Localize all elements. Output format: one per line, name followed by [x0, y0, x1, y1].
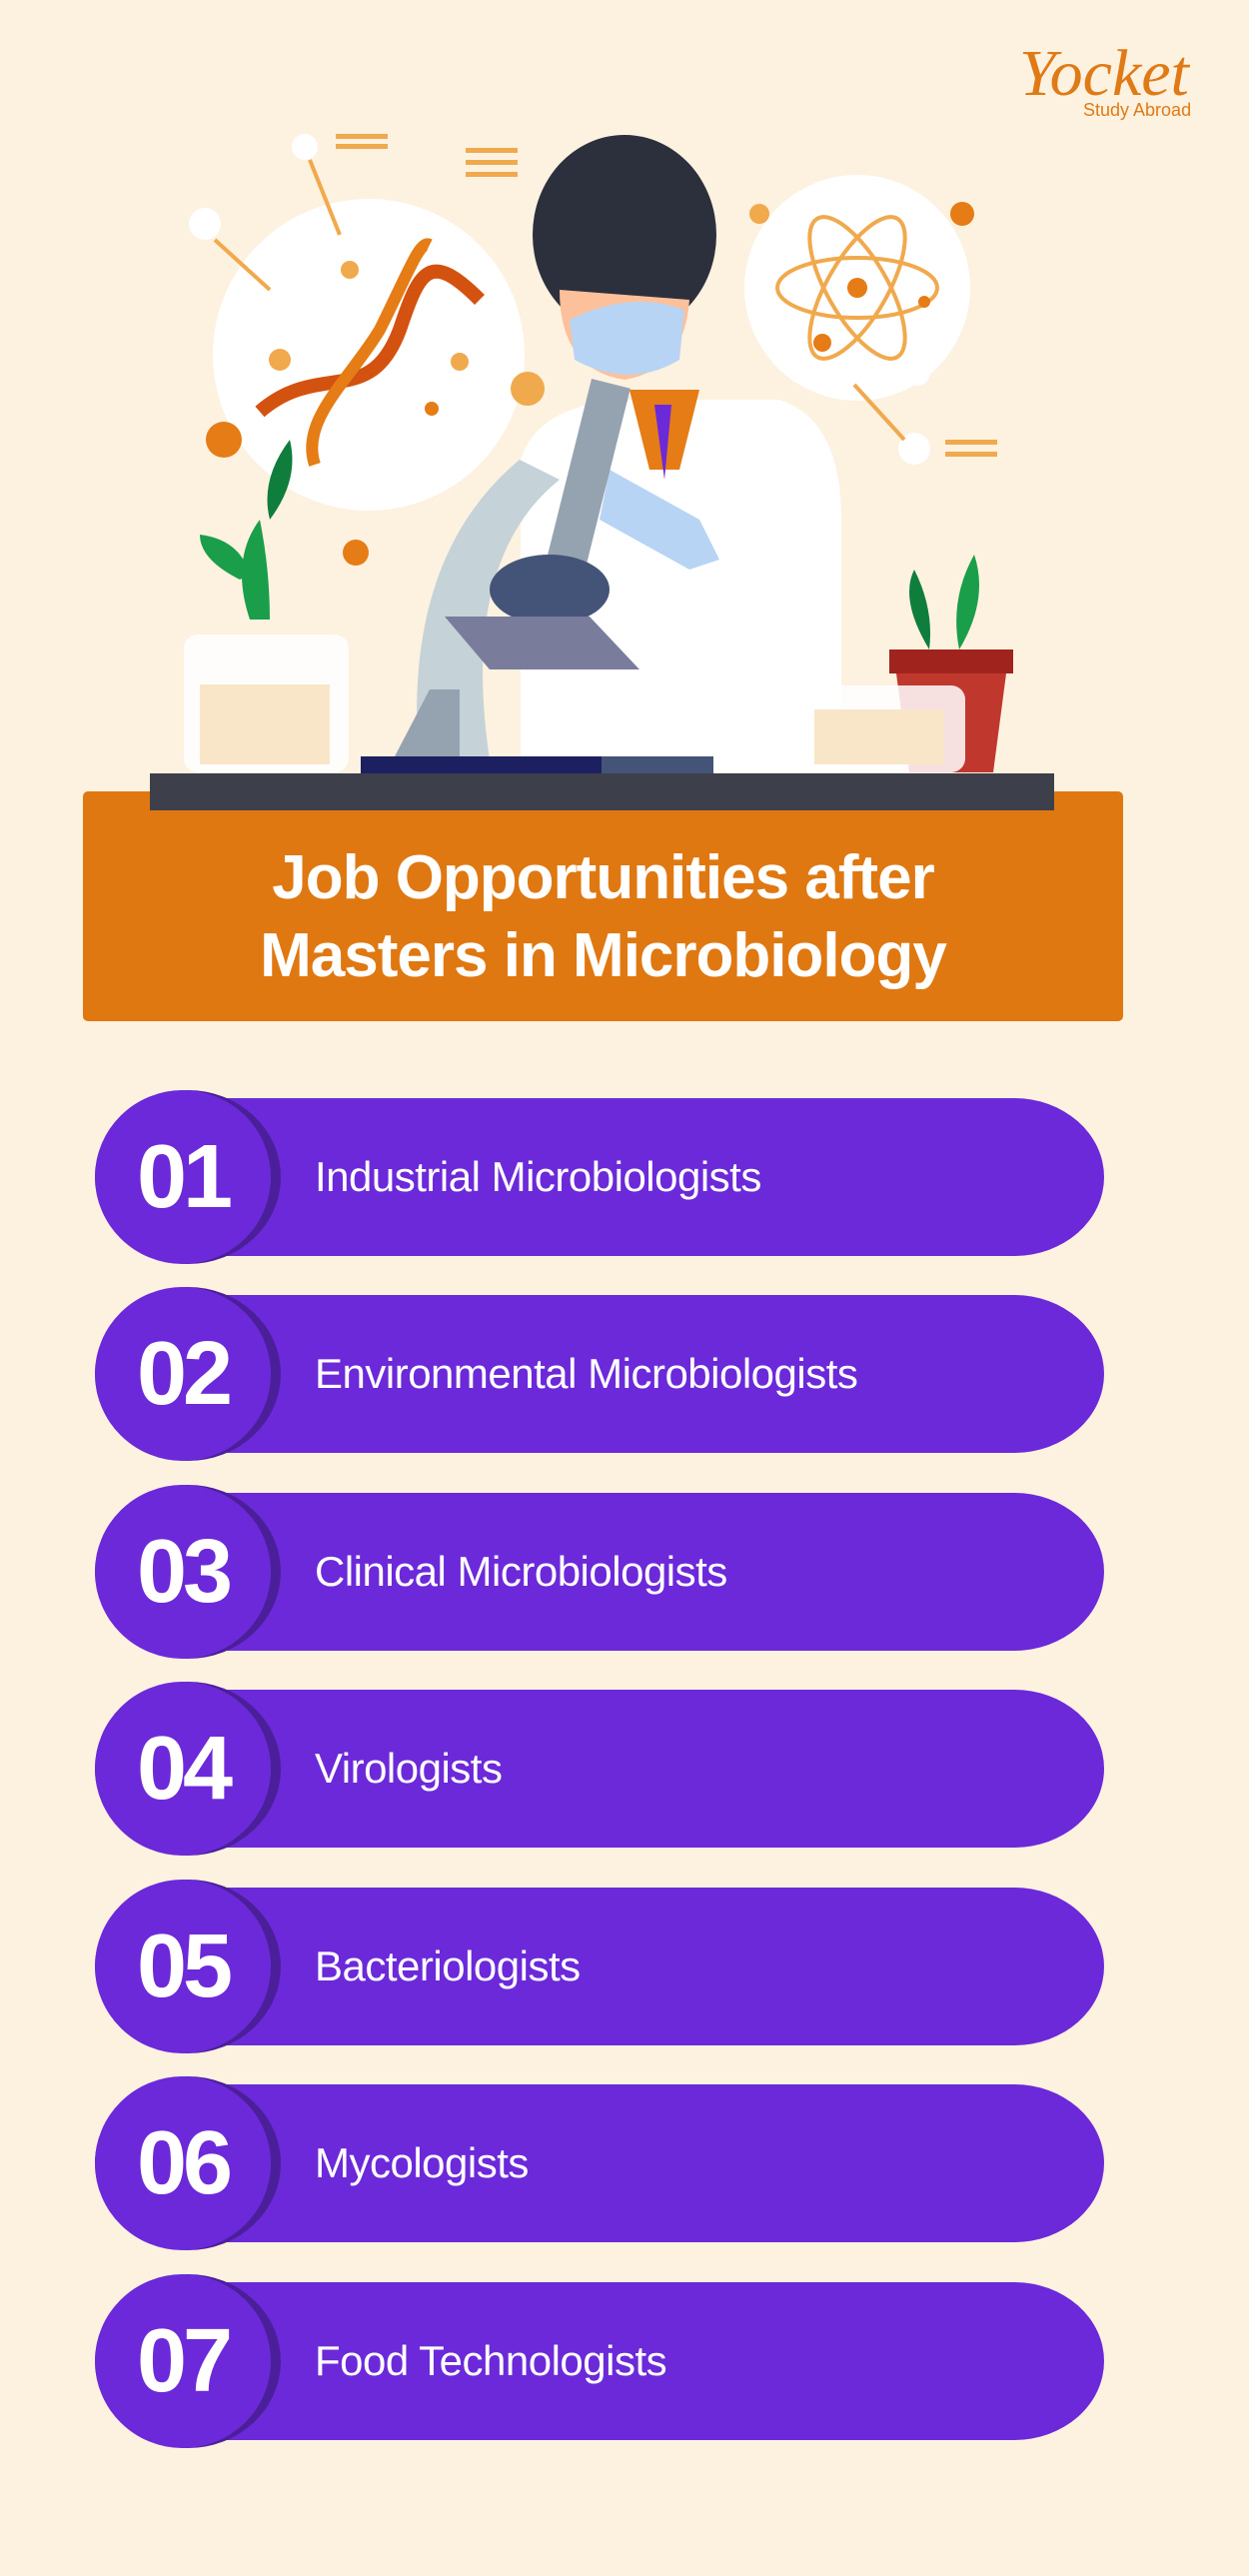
row 06: Mycologists — [315, 2139, 529, 2186]
desk — [150, 773, 1054, 811]
row 04: Virologists — [315, 1745, 502, 1792]
row 01 — [95, 1090, 1104, 1264]
row 05: 05 — [137, 1917, 229, 2016]
left beaker with plant — [184, 440, 349, 772]
atom circle — [744, 175, 997, 465]
row 04: 04 — [137, 1719, 229, 1819]
row 02: Environmental Microbiologists — [315, 1350, 857, 1397]
illustration: scientist with microscope — [150, 37, 1191, 810]
row 06 — [95, 2076, 1104, 2250]
row 06: 06 — [137, 2113, 229, 2213]
dna circle — [213, 199, 525, 511]
row 07: Food Technologists — [315, 2337, 666, 2384]
right plant pot — [889, 555, 1013, 772]
row 05 — [95, 1880, 1104, 2053]
row 07 — [95, 2274, 1104, 2448]
row 03 — [95, 1485, 1104, 1659]
row 04 — [95, 1682, 1104, 1856]
row 01: Industrial Microbiologists — [315, 1153, 761, 1200]
title banner: Masters in Microbiology — [260, 921, 946, 990]
row 05: Bacteriologists — [315, 1942, 581, 1989]
row 02: 02 — [137, 1324, 229, 1424]
row 03: 03 — [137, 1522, 229, 1622]
decorative dots — [189, 134, 545, 566]
row 01: 01 — [137, 1127, 229, 1227]
microscope — [361, 379, 713, 774]
row 07: 07 — [137, 2311, 229, 2411]
title banner: Job Opportunities after — [272, 843, 934, 912]
row 03: Clinical Microbiologists — [315, 1548, 727, 1595]
right dish — [801, 685, 965, 772]
scientist — [521, 135, 841, 772]
logo: Study Abroad — [1083, 100, 1191, 120]
row 02 — [95, 1287, 1104, 1461]
title banner — [83, 810, 1123, 1021]
logo: Yocket — [1019, 37, 1191, 110]
